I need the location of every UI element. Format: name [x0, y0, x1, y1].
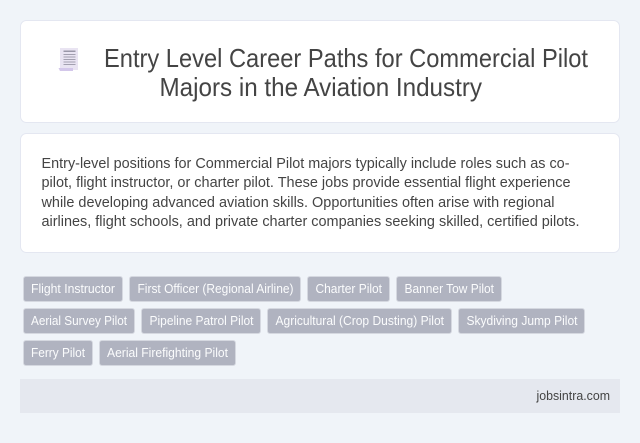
- tag: Aerial Firefighting Pilot: Aerial Firefighting Pilot: [107, 345, 228, 360]
- tag: Agricultural Pilot: [268, 308, 452, 334]
- tag: Flight Instructor: Flight Instructor: [31, 281, 116, 296]
- title: [104, 43, 589, 102]
- header panel: [20, 20, 620, 122]
- description text: Entry-level positions for Commercial Pilot majors typically include roles such as co-: [42, 156, 570, 172]
- tag: Aerial Survey Pilot: Aerial Survey Pilot: [31, 313, 127, 328]
- tag: Pipeline Patrol Pilot: Pipeline Patrol Pilot: [150, 313, 254, 328]
- description text: [41, 156, 579, 230]
- tag: Banner Tow Pilot: [396, 276, 502, 302]
- tag: Aerial Firefighting Pilot: [100, 340, 236, 366]
- tag: Skydiving Jump Pilot: Skydiving Jump Pilot: [466, 313, 578, 328]
- icon: document scroll: [58, 48, 78, 71]
- footer: [20, 379, 620, 413]
- tag: Skydiving Jump Pilot: [458, 308, 584, 334]
- tag: Banner Tow Pilot: Banner Tow Pilot: [404, 281, 494, 296]
- title: Entry Level Career Paths for Commercial Pilot: [104, 43, 589, 73]
- tag: Ferry Pilot: Ferry Pilot: [31, 345, 85, 360]
- description text: while developing advanced aviation skills. Opportunities often arise with regional: [41, 195, 554, 211]
- description text: airlines, flight schools, and private charter companies seeking skilled, certified pilots.: [42, 214, 580, 230]
- description text: pilot, flight instructor, or charter pilot. These jobs provide essential flight experience: [42, 175, 570, 191]
- tag: Flight Instructor: [24, 276, 122, 302]
- tag: Charter Pilot: [308, 276, 390, 302]
- tags: [24, 276, 584, 366]
- footer source text: jobsintra.com: [536, 388, 610, 403]
- tag: Pipeline Patrol Pilot: [142, 308, 260, 334]
- tag: Charter Pilot: Charter Pilot: [316, 281, 382, 296]
- title: Majors in the Aviation Industry: [160, 72, 482, 102]
- description panel: [20, 134, 620, 252]
- tag: Ferry Pilot: [24, 340, 92, 366]
- tag: First Officer: First Officer (Regional Airline): [138, 281, 294, 296]
- tag: First Officer: [130, 276, 300, 302]
- tag: Agricultural Pilot: Agricultural (Crop Dusting) Pilot: [276, 313, 444, 328]
- tag: Aerial Survey Pilot: [24, 308, 134, 334]
